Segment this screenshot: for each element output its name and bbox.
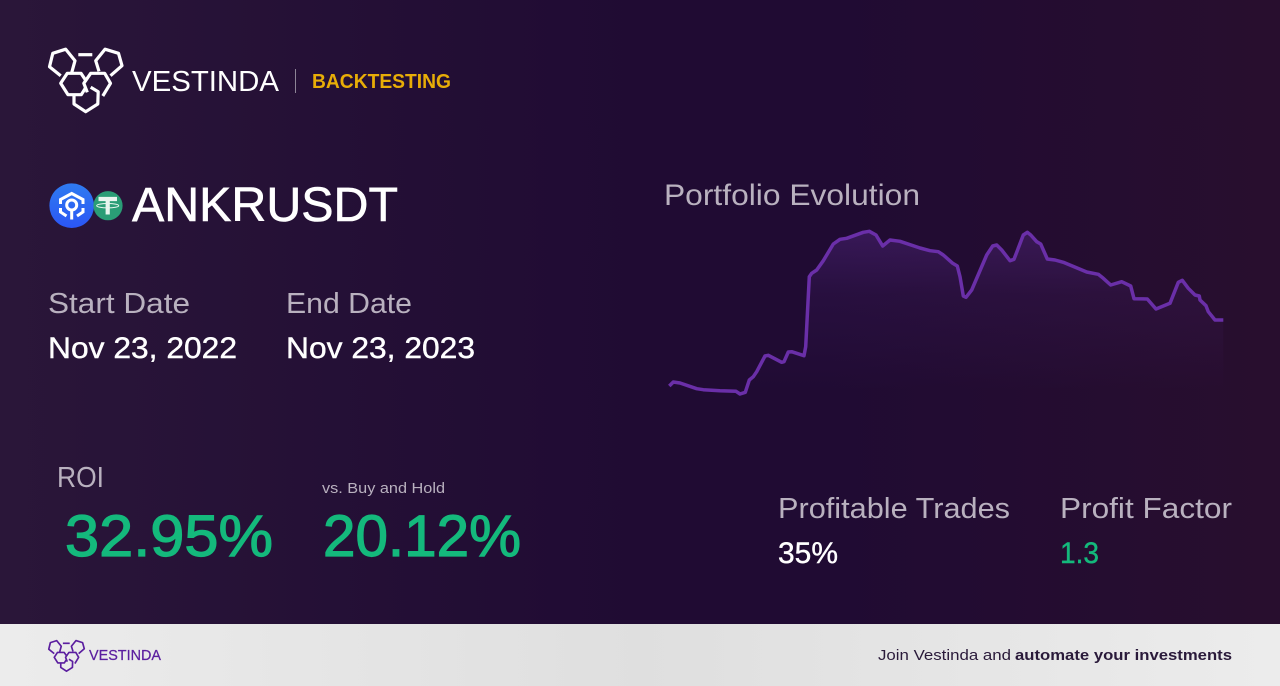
divider — [295, 69, 296, 93]
block: end date: End Date — [286, 288, 412, 320]
metric: profitable trades: 35% — [778, 537, 838, 570]
metric: profit factor: 1.3 — [1060, 537, 1099, 570]
footer call to action: Join Vestinda and — [878, 647, 1011, 664]
title: trading pair: ANKRUSDT — [132, 179, 398, 232]
metric: profitable trades: Profitable Trades — [778, 493, 1010, 525]
footer wordmark: VESTINDA — [89, 648, 161, 664]
icon: footer Vestinda logo — [49, 641, 84, 671]
heading: portfolio evolution: Portfolio Evolution — [664, 179, 920, 212]
metric: vs buy and hold: vs. Buy and Hold — [322, 480, 445, 497]
header: logo and section name — [50, 49, 451, 112]
footer call to action — [878, 647, 1232, 664]
metric: vs buy and hold: 20.12% — [323, 504, 521, 569]
chart: portfolio evolution line — [669, 231, 1223, 394]
block: start date: Nov 23, 2022 — [48, 332, 237, 365]
footer call to action: automate your investments — [1015, 647, 1232, 664]
block: start date — [48, 288, 237, 365]
metric: profit factor — [1060, 493, 1232, 570]
block: end date: Nov 23, 2023 — [286, 332, 475, 365]
footer bar — [0, 624, 1280, 686]
block: end date — [286, 288, 475, 365]
metric: ROI: 32.95% — [65, 504, 273, 569]
icon: Ankr token — [49, 183, 94, 228]
icon: Tether token — [93, 191, 123, 220]
metric: ROI — [57, 462, 273, 569]
section label: BACKTESTING — [312, 71, 451, 93]
block: start date: Start Date — [48, 288, 190, 320]
wordmark: VESTINDA — [132, 66, 280, 98]
metric: profitable trades — [778, 493, 1010, 570]
icon: Vestinda hexagon logo — [50, 49, 122, 112]
metric: profit factor: Profit Factor — [1060, 493, 1232, 525]
metric: ROI: ROI — [57, 462, 104, 494]
